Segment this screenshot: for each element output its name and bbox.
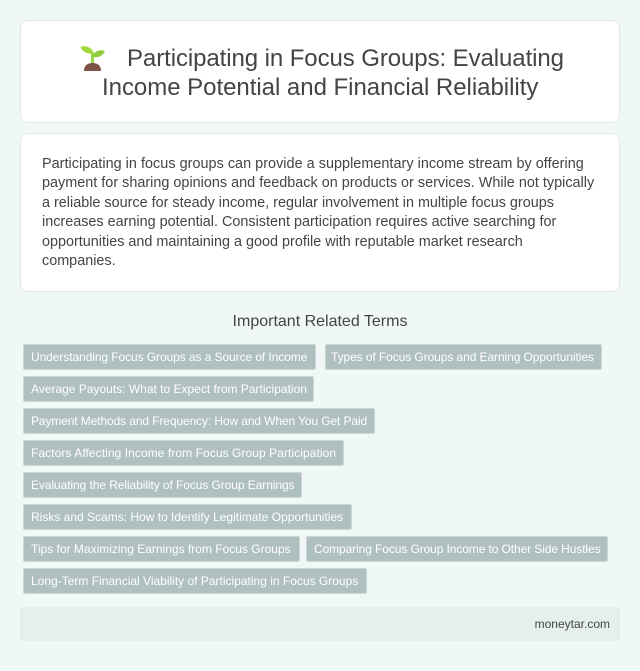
chip	[325, 344, 602, 370]
icon: sprout	[80, 46, 105, 71]
description text: Participating in focus groups can provide a supplementary income stream by offering	[42, 156, 584, 172]
title panel	[20, 20, 620, 123]
chip	[23, 344, 316, 370]
chip: Payment Methods and Frequency: How and When You Get Paid	[31, 414, 367, 428]
chip	[306, 536, 608, 562]
title text	[102, 45, 564, 101]
chip: Types of Focus Groups and Earning Opportunities	[331, 350, 594, 364]
chip: Understanding Focus Groups as a Source of Income	[31, 350, 307, 364]
chip: Comparing Focus Group Income to Other Side Hustles	[314, 542, 600, 556]
description text: a reliable source for steady income, regular involvement in multiple focus groups	[42, 194, 554, 210]
description text	[42, 156, 594, 269]
title text: Participating in Focus Groups: Evaluating	[127, 45, 564, 72]
description panel	[20, 133, 620, 292]
chip	[23, 536, 300, 562]
related terms chips	[23, 344, 608, 594]
description text: companies.	[42, 253, 116, 269]
chip: Risks and Scams: How to Identify Legitimate Opportunities	[31, 510, 343, 524]
chip: Long-Term Financial Viability of Participating in Focus Groups	[31, 574, 358, 588]
chip: Factors Affecting Income from Focus Group Participation	[31, 446, 336, 460]
description text: payment for sharing opinions and feedback on products or services. While not typically	[42, 175, 594, 191]
description text: increases earning potential. Consistent participation requires active searching for	[42, 214, 556, 230]
title text: Income Potential and Financial Reliability	[102, 74, 538, 101]
chip	[23, 408, 375, 434]
chip	[23, 568, 367, 594]
chip	[23, 440, 344, 466]
footer	[20, 607, 620, 641]
description text: opportunities and maintaining a good profile with reputable market research	[42, 234, 523, 250]
chip	[23, 504, 352, 530]
chip: Evaluating the Reliability of Focus Group Earnings	[31, 478, 294, 492]
chip	[23, 472, 302, 498]
related terms heading: Important Related Terms	[233, 313, 407, 330]
footer source text: moneytar.com	[535, 617, 610, 631]
chip	[23, 376, 314, 402]
chip: Tips for Maximizing Earnings from Focus Groups	[31, 542, 291, 556]
chip: Average Payouts: What to Expect from Participation	[31, 382, 307, 396]
